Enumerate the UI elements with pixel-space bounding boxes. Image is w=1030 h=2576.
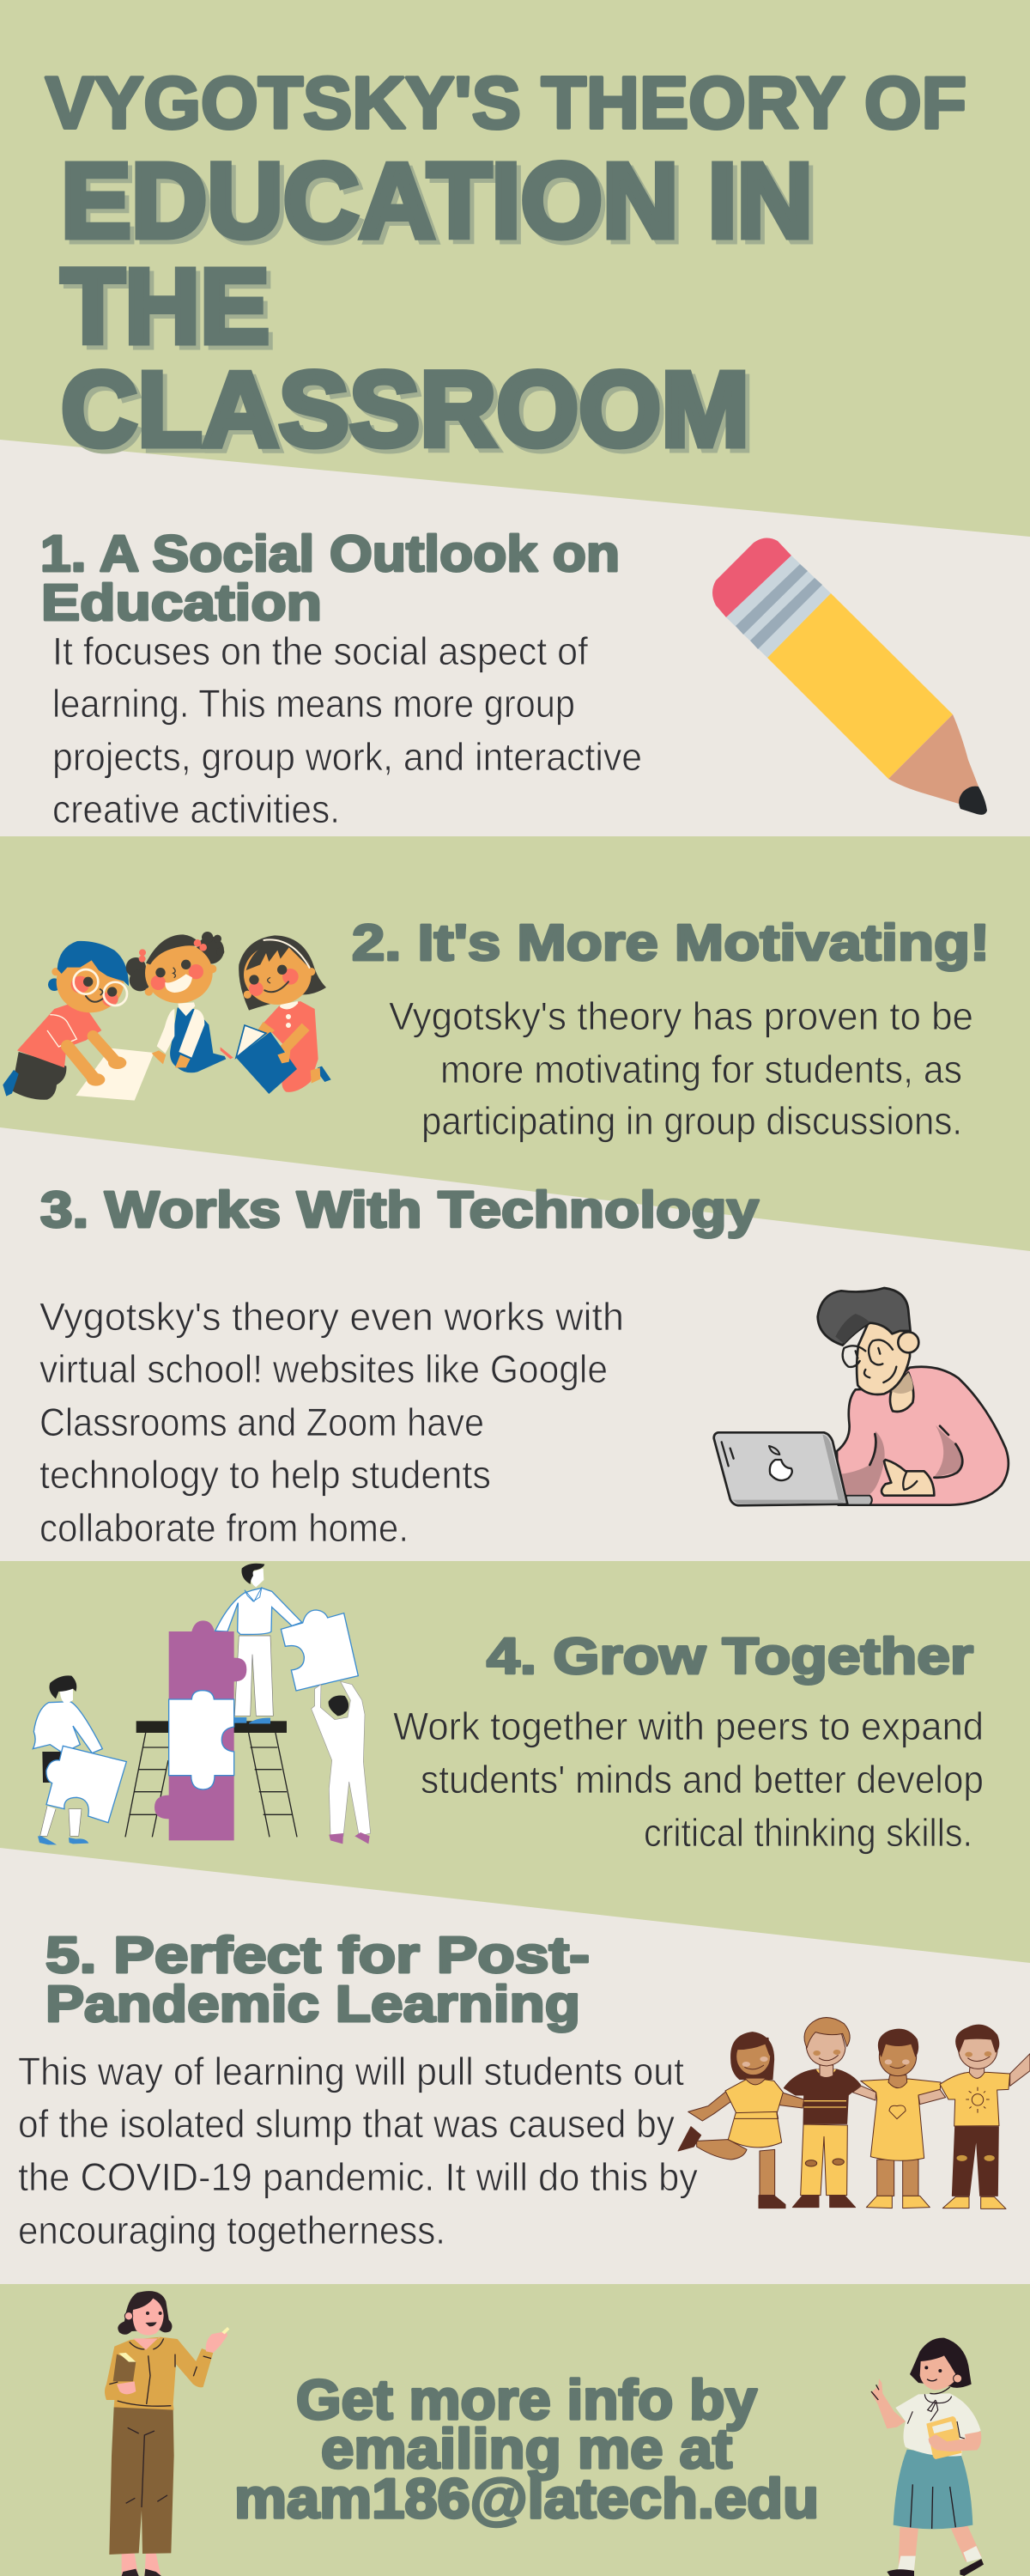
text block: section 3: Vygotsky's theory even works with bbox=[39, 1295, 624, 1339]
heading: section 1 bbox=[40, 526, 620, 631]
girl bbox=[678, 2032, 804, 2208]
text block: section 1 bbox=[52, 629, 642, 831]
text block: section 4: critical thinking skills. bbox=[644, 1811, 972, 1855]
text block: section 5 bbox=[18, 2050, 698, 2252]
legs bbox=[122, 2553, 161, 2576]
text block: section 2: participating in group discussions. bbox=[421, 1099, 962, 1143]
holding arm bbox=[929, 2432, 981, 2451]
title bbox=[45, 63, 966, 473]
sweater bbox=[837, 1367, 1009, 1505]
cardigan bbox=[105, 2337, 213, 2410]
woman on left bbox=[33, 1675, 102, 1844]
title line: Vygotsky's Theory of: VYGOTSKY'S THEORY OF bbox=[45, 63, 966, 144]
footer call to action: emailing me at bbox=[321, 2417, 732, 2480]
text block: section 3 bbox=[39, 1295, 624, 1550]
text block: section 4: students' minds and better develop bbox=[421, 1758, 984, 1801]
paper bbox=[76, 1048, 154, 1101]
text block: section 5: encouraging togetherness. bbox=[18, 2208, 445, 2252]
glasses and face bbox=[843, 1340, 893, 1367]
illustration: people building puzzle bbox=[33, 1564, 371, 1844]
hand bbox=[882, 1460, 934, 1496]
text block: section 2: Vygotsky's theory has proven to be bbox=[389, 994, 973, 1038]
text block: section 2: more motivating for students, as bbox=[440, 1048, 962, 1091]
heading: section 1: Education bbox=[41, 574, 322, 631]
blouse bbox=[895, 2393, 981, 2457]
man on top bbox=[215, 1564, 302, 1723]
notebook bbox=[926, 2416, 962, 2459]
book bbox=[113, 2354, 136, 2381]
third boy bbox=[861, 2029, 946, 2208]
head bbox=[857, 1320, 911, 1394]
purple puzzle stack bbox=[154, 1620, 246, 1840]
arm raised right bbox=[1010, 2054, 1030, 2086]
text block: section 5: of the isolated slump that was caused by bbox=[18, 2102, 675, 2146]
illustration: four friends arm in arm bbox=[678, 2018, 1030, 2208]
text block: section 4 bbox=[393, 1704, 984, 1855]
text block: section 4: Work together with peers to expand bbox=[393, 1704, 984, 1748]
text block: section 3: technology to help students bbox=[39, 1453, 491, 1497]
title main text with drop shadow: EDUCATION IN bbox=[65, 147, 817, 264]
legs bbox=[899, 2527, 918, 2570]
text block: section 5: This way of learning will pull students out bbox=[18, 2050, 684, 2093]
tall boy bbox=[784, 2018, 876, 2208]
ladder platform bbox=[125, 1721, 297, 1837]
illustration: teacher with chalk bbox=[105, 2291, 229, 2576]
skirt bbox=[894, 2450, 972, 2529]
heading: section 5: 5. Perfect for Post- bbox=[45, 1927, 590, 1984]
fourth boy bbox=[940, 2025, 1010, 2208]
heading: section 5 bbox=[45, 1927, 590, 2032]
title main text with drop shadow: THE bbox=[65, 252, 274, 370]
title main text with drop shadow: CLASSROOM bbox=[65, 355, 754, 473]
person lifting piece bbox=[312, 1681, 371, 1844]
girl with headband and book bbox=[236, 935, 331, 1094]
text block: section 3: collaborate from home. bbox=[39, 1506, 409, 1550]
laptop bbox=[841, 1496, 872, 1505]
hand bbox=[117, 2381, 136, 2394]
head and hair bbox=[910, 2338, 972, 2388]
title main text with drop shadow: EDUCATION IN bbox=[61, 143, 813, 260]
text block: section 1: creative activities. bbox=[52, 787, 340, 831]
trousers bbox=[109, 2407, 174, 2555]
raised arm bbox=[871, 2379, 906, 2428]
text block: section 1: It focuses on the social aspect of bbox=[52, 629, 588, 673]
head and hair bbox=[133, 2336, 161, 2350]
title main text with drop shadow: THE bbox=[61, 248, 270, 366]
text block: section 3: virtual school! websites like Google bbox=[39, 1347, 608, 1391]
text block: section 5: the COVID-19 pandemic. It will do this by bbox=[18, 2155, 698, 2199]
boy with glasses bbox=[3, 941, 129, 1100]
text block: section 2 bbox=[389, 994, 973, 1143]
text block: section 3: Classrooms and Zoom have bbox=[39, 1400, 484, 1444]
illustration: student on laptop bbox=[714, 1288, 1009, 1505]
title main text with drop shadow bbox=[61, 143, 817, 473]
hair bbox=[818, 1288, 911, 1346]
heading: section 5: Pandemic Learning bbox=[45, 1976, 580, 2032]
illustration: student with notebook bbox=[871, 2338, 984, 2576]
footer call to action bbox=[234, 2368, 819, 2530]
heading: section 4: 4. Grow Together bbox=[487, 1628, 973, 1685]
illustration: three children reading bbox=[3, 932, 331, 1101]
panel: section 5 background bbox=[0, 1848, 1030, 2284]
panel: section 3 background bbox=[0, 1127, 1030, 1561]
white puzzle piece right bbox=[281, 1610, 358, 1691]
text block: section 1: projects, group work, and interactive bbox=[52, 735, 642, 779]
panel: section 1 background bbox=[0, 440, 1030, 836]
title main text with drop shadow: CLASSROOM bbox=[61, 351, 749, 469]
white puzzle piece centre bbox=[169, 1691, 234, 1789]
icon: pencil bbox=[712, 538, 987, 815]
heading: section 1: 1. A Social Outlook on bbox=[40, 526, 620, 582]
laptop logo bbox=[770, 1460, 792, 1480]
footer call to action: mam186@latech.edu bbox=[234, 2467, 819, 2530]
heading: section 2: 2. It's More Motivating! bbox=[352, 914, 990, 971]
footer call to action: Get more info by bbox=[296, 2368, 757, 2431]
white puzzle piece left bbox=[46, 1746, 126, 1823]
neck bbox=[890, 1372, 913, 1412]
heading: section 3: 3. Works With Technology bbox=[40, 1182, 759, 1238]
text block: section 1: learning. This means more group bbox=[52, 682, 575, 726]
girl with curly hair bbox=[126, 932, 233, 1072]
